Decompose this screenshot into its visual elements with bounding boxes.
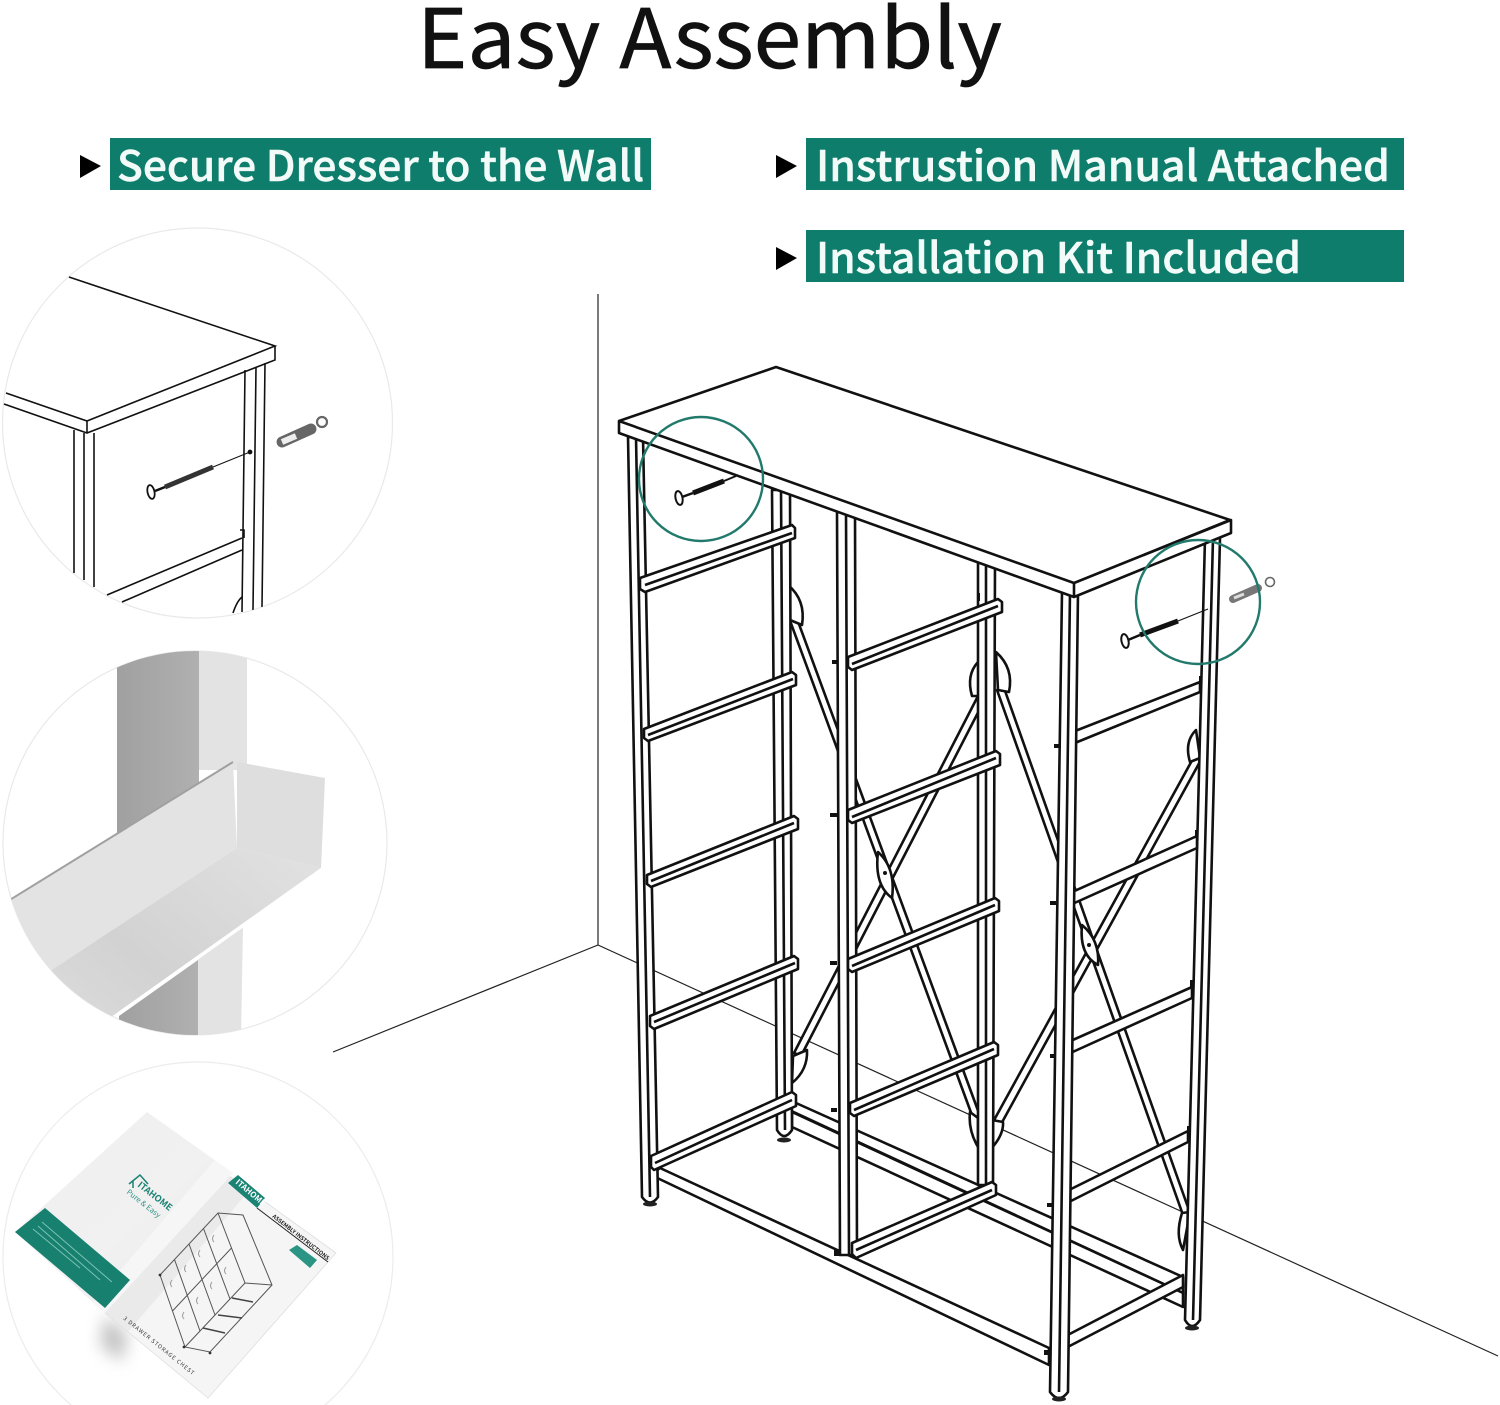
room corner: wall and floor lines <box>333 294 1498 1356</box>
back legs <box>772 490 1220 1326</box>
highlight circle: right screw <box>1136 540 1260 664</box>
dresser top board <box>619 367 1231 597</box>
booklet shadow <box>100 1315 128 1362</box>
front legs: left and centre <box>628 437 857 1255</box>
booklet left page <box>15 1112 233 1313</box>
centre bay shelf rails <box>848 599 1002 1258</box>
booklet right page <box>105 1175 336 1398</box>
left bay shelf rails <box>640 525 798 1170</box>
detail circle: instruction manual booklet <box>3 1062 393 1405</box>
booklet left page: ITAHOME <box>135 1178 175 1214</box>
front leg: right <box>1050 592 1078 1398</box>
cross braces: right bay <box>883 652 1202 1250</box>
feature: secure dresser to the wall: Secure Dresser to the Wall <box>117 133 644 194</box>
dresser feet <box>643 1138 1199 1402</box>
front bottom rail <box>651 1168 1049 1365</box>
highlight circle: left screw <box>639 417 763 541</box>
feature: instruction manual attached: Instrustion Manual Attached <box>816 133 1390 194</box>
feature: installation kit included: Installation Kit Included <box>816 225 1301 286</box>
screw: left bay <box>674 476 736 506</box>
dresser frame line drawing <box>619 367 1231 1398</box>
back bottom rails <box>785 1103 1183 1307</box>
booklet left page: Pure & Easy <box>124 1187 163 1221</box>
detail circle: drawer rail close-up <box>2 650 388 1036</box>
booklet right page: ITAHOME <box>233 1177 268 1209</box>
booklet right page: ASSEMBLY INSTRUCTIONS <box>270 1212 332 1262</box>
cross braces: centre bay <box>788 585 985 1147</box>
booklet right page: 3 DRAWER STORAGE CHEST <box>122 1314 197 1377</box>
screw and wall plug: right bay <box>1120 578 1274 649</box>
rail bracket nubs <box>830 593 1202 1355</box>
right bay shelf rails <box>1060 682 1200 1351</box>
booklet dresser diagram <box>159 1213 272 1354</box>
detail circle: wall screw close-up <box>2 228 392 618</box>
